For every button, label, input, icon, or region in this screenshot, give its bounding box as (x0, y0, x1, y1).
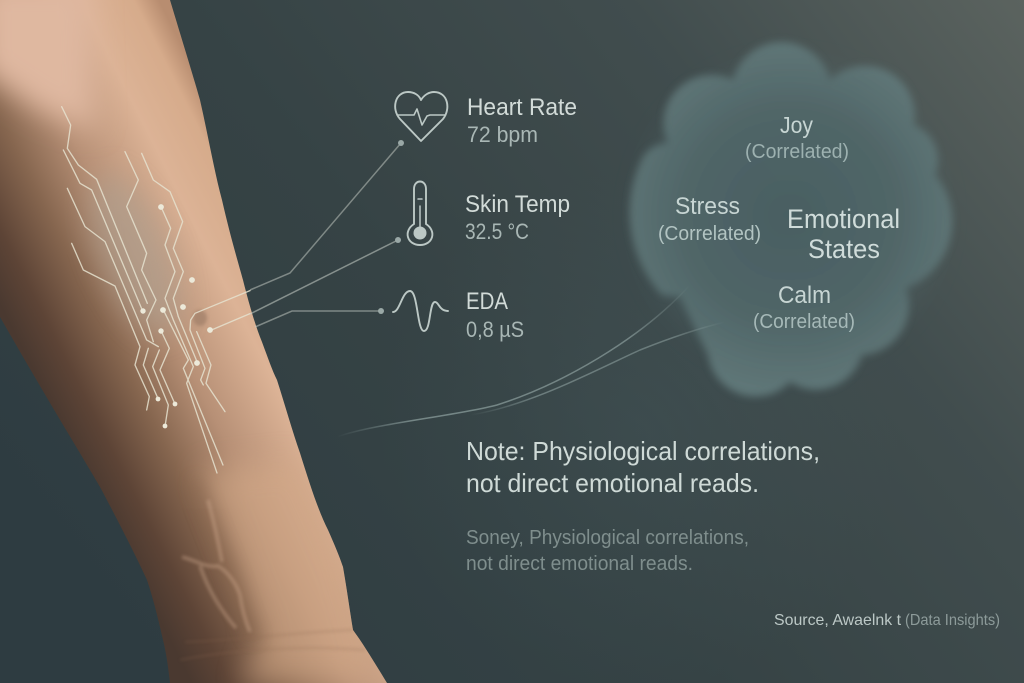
icon: heart (395, 92, 447, 141)
heart rate reading: 72 bpm (467, 122, 538, 147)
circuit nodes (140, 204, 213, 428)
secondary note: not direct emotional reads. (466, 553, 693, 575)
source: Source, Awaelnk t (774, 612, 902, 629)
heading: Emotional States: Emotional (787, 204, 900, 234)
source (774, 612, 1000, 629)
heart rate reading: Heart Rate (467, 94, 577, 121)
skin temperature reading (465, 191, 570, 244)
connector line: heart rate (250, 140, 404, 290)
icon: thermometer (408, 182, 432, 245)
state: Stress: Stress (675, 193, 740, 220)
cloud: emotional states (337, 42, 952, 437)
EDA reading (466, 288, 524, 342)
note (466, 436, 820, 498)
source: (Data Insights) (905, 612, 1000, 629)
note: not direct emotional reads. (466, 468, 759, 498)
state: Joy: (Correlated) (745, 141, 849, 163)
heading: Emotional States (787, 204, 900, 264)
state: Stress: (Correlated) (658, 223, 761, 245)
connector line: EDA (255, 308, 384, 327)
EDA reading: EDA (466, 288, 508, 315)
heading: Emotional States: States (808, 234, 880, 264)
EDA reading: 0,8 µS (466, 317, 524, 342)
secondary note (466, 527, 749, 575)
forearm illustration (0, 0, 400, 683)
state: Joy (745, 112, 849, 163)
wisps from arm to cloud (337, 285, 725, 437)
heart rate reading (467, 94, 577, 147)
icon: EDA waveform (393, 291, 448, 331)
state: Calm (753, 282, 855, 333)
skin temperature reading: 32.5 °C (465, 219, 529, 244)
state: Joy: Joy (780, 112, 813, 138)
note: Note: Physiological correlations, (466, 436, 820, 466)
state: Calm: (Correlated) (753, 311, 855, 333)
connector line: skin temperature (250, 237, 401, 314)
state: Stress (658, 193, 761, 245)
state: Calm: Calm (778, 282, 831, 309)
secondary note: Soney, Physiological correlations, (466, 527, 749, 549)
skin temperature reading: Skin Temp (465, 191, 570, 218)
circuit traces on skin (62, 107, 250, 473)
